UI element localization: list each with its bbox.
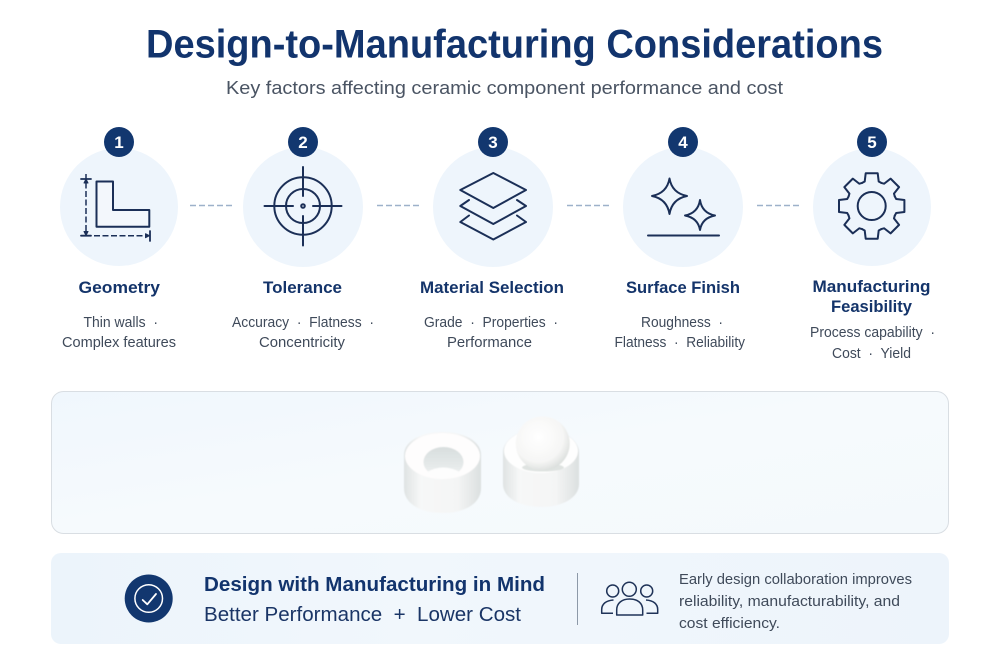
panel: manufacturing feasibility: [810, 127, 935, 362]
connector: 3 to 4: [567, 204, 609, 206]
icon circle: [433, 147, 553, 267]
ceramic ring: [404, 432, 481, 513]
description: Accuracy · Flatness ·: [232, 315, 374, 331]
description: [810, 325, 935, 362]
ceramic seat with ball: [503, 416, 579, 507]
description: Grade · Properties ·: [424, 315, 558, 331]
heading: Feasibility: [831, 298, 913, 316]
panel: product photo: [52, 392, 948, 534]
description: Cost · Yield: [832, 346, 911, 362]
icon: check badge: [125, 574, 173, 622]
number badge 2: 2: [298, 133, 308, 152]
number badge 3: [478, 127, 508, 157]
icon: people: [602, 582, 658, 615]
heading: Geometry: [78, 279, 161, 297]
number badge 5: 5: [867, 133, 877, 152]
number badge 2: [288, 127, 318, 157]
headline: Design with Manufacturing in Mind: [204, 574, 545, 596]
number badge 5: [857, 127, 887, 157]
heading: Material Selection: [420, 279, 564, 297]
supporting text: cost efficiency.: [679, 616, 780, 632]
description: Flatness · Reliability: [614, 335, 746, 351]
connector: 4 to 5: [757, 204, 799, 206]
supporting text: [679, 572, 912, 632]
icon: sparkles over surface: [648, 178, 719, 236]
photo background: [52, 392, 948, 534]
description: Performance: [447, 335, 532, 351]
number badge 1: [104, 127, 134, 157]
description: Complex features: [62, 335, 176, 351]
supporting text: Early design collaboration improves: [679, 572, 912, 588]
icon circle: [60, 148, 178, 266]
vertical divider: [576, 573, 578, 625]
connector: 1 to 2: [190, 204, 232, 206]
description: Thin walls ·: [84, 315, 158, 331]
description: Concentricity: [259, 335, 346, 351]
heading: Surface Finish: [626, 279, 740, 297]
description: [424, 315, 558, 351]
icon: gear: [839, 173, 904, 239]
supporting text: reliability, manufacturability, and: [679, 594, 900, 610]
icon: stacked layers: [460, 173, 526, 240]
description: Roughness ·: [641, 315, 723, 331]
description: Process capability ·: [810, 325, 935, 341]
number badge 1: 1: [114, 133, 124, 152]
subtitle: Key factors affecting ceramic component performance and cost: [226, 77, 783, 98]
icon: crosshair target: [264, 167, 342, 246]
heading: Manufacturing: [812, 278, 930, 296]
heading: [812, 278, 930, 316]
panel: geometry: [60, 127, 178, 351]
connector: 2 to 3: [377, 204, 419, 206]
icon circle: [813, 148, 931, 266]
icon circle: [243, 147, 363, 267]
title: Design-to-Manufacturing Considerations: [146, 22, 883, 66]
description: [614, 315, 746, 351]
number badge 4: 4: [678, 133, 688, 152]
heading: Tolerance: [263, 279, 342, 297]
icon circle: [623, 147, 743, 267]
panel: material selection: [420, 127, 564, 351]
number badge 4: [668, 127, 698, 157]
icon: dimensioned L profile: [81, 174, 150, 241]
panel: tolerance: [232, 127, 374, 351]
description: [62, 315, 176, 351]
tagline: Better Performance + Lower Cost: [204, 604, 521, 626]
banner background: [51, 553, 949, 644]
number badge 3: 3: [488, 133, 498, 152]
description: [232, 315, 374, 351]
panel: call to action: [51, 553, 949, 644]
panel: surface finish: [614, 127, 746, 351]
